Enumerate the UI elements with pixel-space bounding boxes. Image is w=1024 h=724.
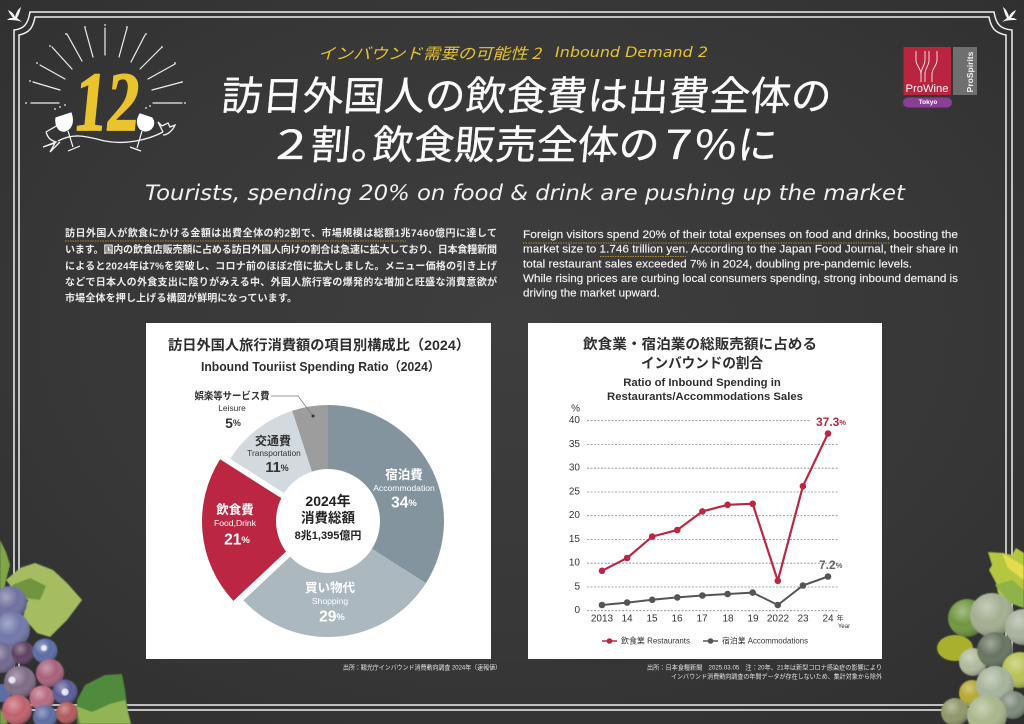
label accommodation [373, 467, 435, 512]
gold dotted underlines [65, 241, 890, 256]
japanese body text: います。国内の飲食店販売額に占める訪日外国人向けの割合は急速に拡大しており、日本食糧新聞 [65, 243, 497, 256]
english body text: While rising prices are curbing local consumers spending, strong inbound demand is [523, 273, 958, 285]
label food and drink: Food,Drink [214, 518, 257, 528]
chalk rays [31, 28, 182, 103]
chart title english: Restaurants/Accommodations Sales [607, 391, 803, 403]
label food and drink: 21% [224, 532, 250, 548]
leader dot [312, 414, 314, 418]
label accommodation: Accommodation [373, 483, 435, 493]
chart title japanese: 訪日外国人旅行消費額の項目別構成比（2024） [168, 337, 470, 353]
title line 2: 2 [274, 113, 309, 171]
label shopping: 買い物代 [305, 580, 355, 595]
x axis labels: 24 [822, 614, 834, 624]
Tokyo pill [903, 98, 952, 108]
panel background [528, 323, 882, 659]
legend [602, 636, 808, 646]
label shopping: Shopping [312, 596, 348, 606]
x axis labels: 年 [836, 614, 844, 622]
x axis labels: 16 [671, 614, 683, 624]
kicker: Inbound Demand 2 [555, 45, 708, 61]
y axis labels: % [571, 404, 580, 414]
grid lines [587, 421, 838, 611]
y axis labels: 10 [569, 558, 580, 569]
logo ProWine Tokyo [903, 47, 977, 108]
y axis labels: 0 [574, 605, 580, 616]
donut centre total: 2024年 [305, 493, 351, 509]
label accommodation: 34% [391, 494, 417, 512]
x axis labels: 18 [722, 614, 734, 624]
ribbon [43, 122, 175, 152]
label transportation: Transportation [247, 448, 301, 458]
japanese body text: によると2024年は7%を突破し、コロナ前のほぼ2倍に拡大しました。メニュー価格の引き上げ [65, 260, 497, 272]
value label 7.2: 7.2% [819, 558, 843, 572]
chart title english [607, 377, 803, 403]
english body text: total restaurant sales exceeded 7% in 2024, doubling pre-pandemic levels. [523, 258, 912, 270]
panel: inbound share line chart [528, 323, 882, 659]
corner ornaments [7, 7, 1017, 22]
japanese body text: などで日本人の外食支出に陰りがみえる中、外国人旅行客の爆発的な増加と旺盛な消費意欲が [65, 276, 497, 288]
source note right: インバウンド消費動向調査の年間データが存在しないため、集計対象から除外 [671, 672, 883, 680]
chart title japanese: 飲食業・宿泊業の総販売額に占める [583, 336, 817, 352]
bottle outlines [916, 51, 937, 82]
panel background [146, 323, 491, 659]
label food and drink [214, 502, 257, 548]
japanese body text: 市場全体を押し上げる構図が鮮明になっています。 [65, 292, 297, 304]
left glass [56, 113, 80, 151]
x axis labels: 14 [621, 614, 633, 624]
label transportation: 11% [265, 460, 289, 476]
label leisure: 5% [225, 415, 241, 431]
x axis labels: 2013 [591, 614, 614, 624]
x axis labels: 2022 [767, 614, 790, 624]
main title [219, 64, 834, 171]
Tokyo label: Tokyo [919, 99, 937, 106]
bubbles [54, 104, 151, 110]
source note right [647, 662, 883, 680]
y axis labels: 25 [569, 486, 580, 498]
y axis labels: 5 [574, 582, 580, 592]
source note right: 出所：日本食糧新聞 2025.03.05 注：20年、21年は新型コロナ感染症の影響により [647, 662, 882, 672]
x axis labels [591, 614, 850, 630]
japanese body text [65, 226, 497, 304]
title line 2: 7 [662, 113, 695, 171]
gray block [953, 47, 977, 95]
label food and drink: 飲食費 [216, 502, 254, 517]
donut chart [202, 405, 444, 637]
y axis labels: 35 [569, 439, 580, 450]
label leisure [194, 390, 270, 431]
donut centre total: 消費総額 [301, 510, 355, 526]
english subtitle: Tourists, spending 20% on food & drink are pushing up the market [145, 181, 906, 205]
ProWine wordmark: ProWine [906, 83, 948, 95]
number badge 12 [25, 24, 186, 152]
chart title japanese [583, 336, 817, 371]
legend: 宿泊業 Accommodations [722, 636, 808, 646]
accommodations line [599, 573, 831, 608]
label leisure: 娯楽等サービス費 [194, 390, 270, 402]
kicker: インバウンド需要の可能性 2 [318, 42, 543, 64]
chart title english: Inbound Touriist Spending Ratio（2024） [201, 360, 440, 374]
label transportation [247, 433, 301, 476]
english body text: market size to 1.746 trillion yen. According to the Japan Food Journal, their share in [523, 244, 958, 256]
title line 2: 飲食販売全体の [370, 113, 663, 171]
number 12: 12 [70, 56, 144, 149]
source note left: 出所：観光庁インバウンド消費動向調査 2024年（速報値） [343, 662, 501, 672]
donut centre total: 8兆1,395億円 [295, 528, 361, 542]
label transportation: 交通費 [255, 433, 291, 448]
kicker [318, 42, 708, 64]
illustration: red grapes [0, 540, 131, 724]
english body text: driving the market upward. [523, 288, 660, 300]
title line 2: 割。 [308, 113, 394, 171]
legend: 飲食業 Restaurants [621, 636, 690, 646]
illustration: white grapes [937, 548, 1024, 724]
x axis labels: 23 [797, 614, 809, 624]
y axis labels: 15 [569, 534, 580, 545]
chart title japanese: インバウンドの割合 [641, 355, 763, 371]
title line 2: % [692, 113, 740, 171]
leisure leader line [271, 396, 313, 416]
japanese body text: 訪日外国人が飲食にかける金額は出費全体の約2割で、市場規模は総額1兆7460億円に達して [65, 226, 497, 240]
label shopping: 29% [319, 608, 345, 626]
label accommodation: 宿泊費 [385, 467, 423, 482]
y axis labels [569, 404, 580, 616]
ray end dots [25, 24, 186, 104]
y axis labels: 30 [569, 463, 580, 474]
label leisure: Leisure [218, 403, 246, 413]
right glass [130, 114, 154, 151]
english body text: Foreign visitors spend 20% of their total expenses on food and drinks, boosting the [523, 229, 958, 241]
title line 2 [274, 113, 781, 171]
x axis labels: 19 [747, 614, 759, 624]
panel: spending ratio donut [146, 323, 491, 659]
y axis labels: 20 [569, 510, 580, 521]
y axis labels: 40 [569, 415, 580, 426]
title line 1: 訪日外国人の飲食費は出費全体の [219, 64, 834, 122]
donut centre total [295, 493, 361, 542]
x axis labels: 17 [696, 614, 708, 624]
red block [904, 47, 951, 95]
chart title english: Ratio of Inbound Spending in [623, 377, 781, 389]
ProSpirits wordmark: ProSpirits [965, 51, 975, 92]
title line 2: に [735, 113, 781, 171]
english body text [523, 229, 958, 300]
label shopping [305, 580, 355, 626]
x axis labels: Year [838, 624, 850, 630]
value label 37.3: 37.3% [816, 415, 846, 429]
restaurants line [599, 430, 831, 584]
x axis labels: 15 [646, 614, 658, 624]
